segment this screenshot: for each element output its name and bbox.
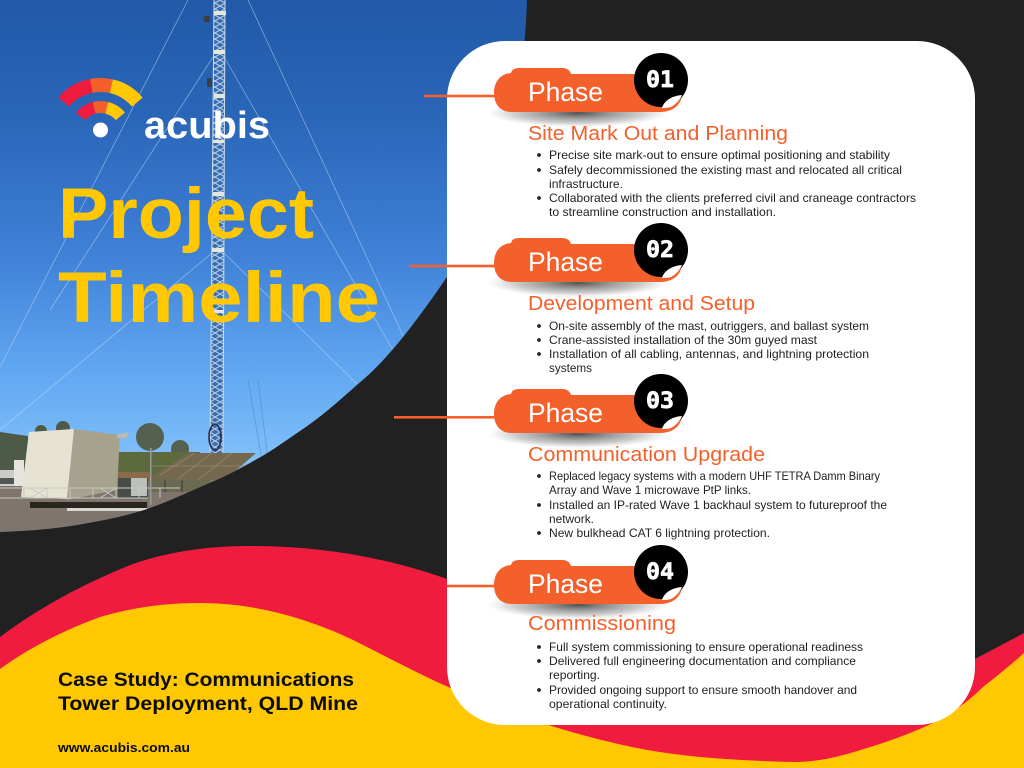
title: Project Timeline: Timeline (58, 259, 380, 338)
logo: acubis wifi mark and wordmark: acubis (144, 105, 270, 147)
phase 4: Full system commissioning to ensure operational readiness (549, 640, 863, 654)
white content card (447, 41, 975, 725)
logo: acubis wifi mark and wordmark (64, 85, 270, 147)
phase 1: Precise site mark-out to ensure optimal positioning and stability (549, 148, 890, 162)
phase 3: Phase (528, 398, 603, 428)
case study caption: Case Study: Communications (58, 669, 354, 691)
phase 3: Array and Wave 1 microwave PtP links. (549, 483, 751, 497)
phase 2 (409, 223, 869, 375)
phase 4: Provided ongoing support to ensure smooth handover and (549, 683, 857, 697)
phase 2: systems (549, 361, 592, 375)
case study caption: Tower Deployment, QLD Mine (58, 693, 358, 715)
phase 4: operational continuity. (549, 697, 667, 711)
phase 2: Phase (528, 247, 603, 277)
phase 3: Installed an IP-rated Wave 1 backhaul system to futureproof the (549, 498, 887, 512)
phase 3: New bulkhead CAT 6 lightning protection. (549, 526, 770, 540)
phase 4: 04 (646, 560, 674, 585)
phase 2: On-site assembly of the mast, outriggers, and ballast system (549, 319, 869, 333)
phase 1: Safely decommissioned the existing mast and relocated all critical (549, 163, 902, 177)
phase 1: infrastructure. (549, 177, 623, 191)
website url: www.acubis.com.au (57, 740, 190, 755)
phase 1: to streamline construction and installation. (549, 205, 776, 219)
phase 1 (424, 53, 916, 219)
phase 4: reporting. (549, 668, 600, 682)
phase 3 (394, 374, 887, 540)
phase 3: Replaced legacy systems with a modern UHF TETRA Damm Binary (549, 469, 880, 483)
red wave (0, 546, 1024, 768)
case study caption (58, 669, 358, 715)
phase 1: 01 (646, 68, 674, 93)
phase 4: Delivered full engineering documentation and compliance (549, 654, 856, 668)
phase 2: 02 (646, 238, 674, 263)
phase 4: Commissioning (528, 613, 676, 635)
phase 1: Site Mark Out and Planning (528, 123, 788, 145)
phase 3: Communication Upgrade (528, 444, 765, 466)
phase 2: Development and Setup (528, 293, 755, 315)
title: Project Timeline (58, 175, 380, 338)
phase 1: Collaborated with the clients preferred civil and craneage contractors (549, 191, 916, 205)
phase 4 (447, 545, 863, 711)
phase 2: Crane-assisted installation of the 30m guyed mast (549, 333, 818, 347)
photo: communications tower under blue sky (0, 0, 530, 534)
phase 1: Phase (528, 77, 603, 107)
title: Project Timeline: Project (58, 175, 314, 254)
phase 3: 03 (646, 389, 674, 414)
phase 2: Installation of all cabling, antennas, and lightning protection (549, 347, 869, 361)
phase 3: network. (549, 512, 594, 526)
phase 4: Phase (528, 569, 603, 599)
yellow wave (0, 603, 1024, 768)
